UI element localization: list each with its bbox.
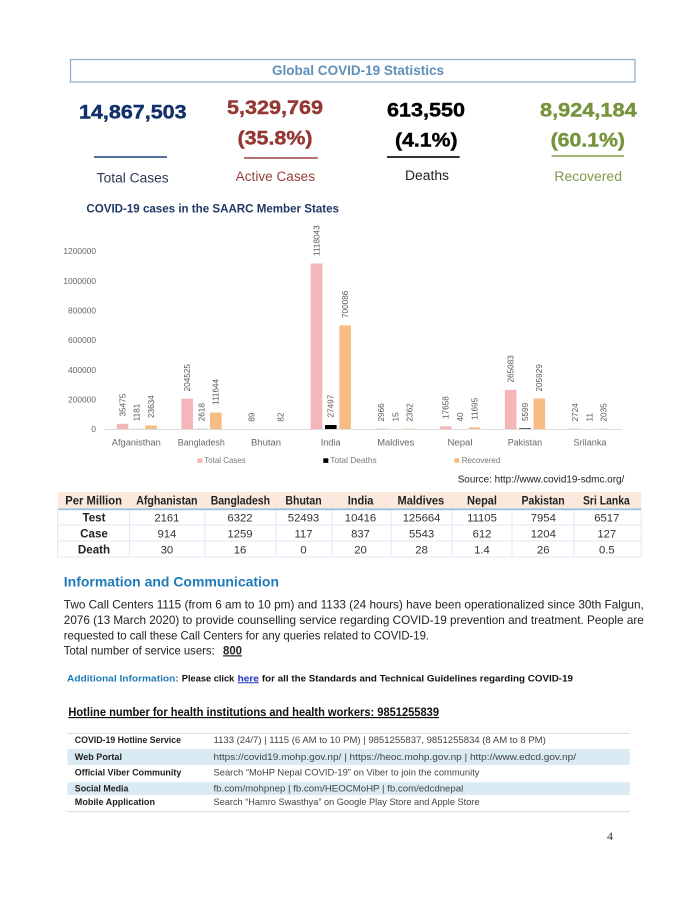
table header row: Bhutan [285, 494, 322, 507]
chart heading: COVID-19 cases in the SAARC Member States [86, 202, 339, 215]
row: web portal [75, 752, 576, 762]
bars: Srilanka: 2724 [571, 403, 580, 422]
paragraph: call centers [64, 599, 644, 657]
stat: deaths: Deaths [405, 168, 449, 183]
table header row: Maldives [398, 494, 444, 507]
row: social media [75, 784, 463, 794]
table header row: India [348, 494, 374, 507]
table row: test: 10416 [345, 513, 376, 525]
category labels [112, 436, 607, 447]
stat: recovered: 8,924,184 [540, 100, 637, 121]
table row: death: 26 [537, 544, 550, 556]
additional information line: for all the Standards and Technical Guidelines regarding COVID-19 [262, 673, 573, 684]
page number: 4 [607, 829, 613, 843]
title box [70, 60, 635, 82]
bars: Bangladesh: 204525 [183, 364, 192, 391]
y axis labels: 400000 [68, 365, 96, 375]
bars: Bangladesh: 111644 [212, 378, 221, 405]
table row: death: Death [78, 543, 110, 556]
row: viber community: Official Viber Community [75, 768, 182, 778]
stat: recovered [540, 100, 637, 184]
stat: total cases: Total Cases [97, 170, 169, 185]
stat: active cases: Active Cases [236, 169, 315, 184]
row: mobile application: Search “Hamro Swasthya” on Google Play Store and Apple Store [214, 797, 480, 807]
y axis labels: 200000 [68, 394, 96, 404]
row: mobile application: Mobile Application [75, 797, 155, 807]
per million table [58, 492, 641, 557]
bars: Nepal [440, 396, 480, 429]
bar chart: SAARC cases [63, 225, 623, 465]
paragraph: call centers: requested to call these Call Centers for any queries related to COVID-19. [64, 629, 429, 642]
stat: recovered: Recovered [554, 169, 622, 184]
paragraph: call centers: Two Call Centers 1115 (from 6 am to 10 pm) and 1133 (24 hours) have been operationalized since 30th Falgun, [64, 599, 644, 612]
bars: Afganisthan: 23634 [147, 395, 156, 418]
row: web portal: Web Portal [75, 752, 122, 762]
bars: Maldives [375, 403, 416, 429]
table header row: Bangladesh [211, 494, 270, 507]
row: viber community: Search “MoHP Nepal COVID-19” on Viber to join the community [214, 768, 480, 778]
category labels: India [321, 436, 341, 447]
table header row: Pakistan [522, 494, 565, 507]
table row: case: 837 [351, 529, 370, 541]
table row: case: 1259 [227, 529, 253, 541]
additional information line: Additional Information: [67, 673, 179, 684]
bars: Bhutan [248, 412, 285, 422]
bars: Nepal: 17658 [442, 396, 451, 419]
table row: test: Test [83, 512, 106, 525]
row: social media: Social Media [75, 784, 129, 794]
table row: test: 2161 [154, 513, 179, 525]
bars: Maldives: 2362 [406, 403, 415, 422]
bars: Pakistan: 265083 [507, 355, 516, 382]
table row: test: 52493 [288, 513, 319, 525]
bars: Afganisthan: 35475 [118, 393, 127, 416]
bars: India: 1118043 [312, 225, 321, 256]
stat: deaths: 613,550 [387, 101, 465, 122]
stat: deaths: (4.1%) [395, 131, 458, 152]
table row: death: 0.5 [599, 544, 615, 556]
category labels: Afganisthan [112, 436, 161, 447]
category labels: Srilanka [574, 436, 607, 447]
bars: Maldives: 2966 [377, 403, 386, 422]
row: mobile application [75, 797, 480, 807]
table row: death: 16 [234, 544, 246, 556]
table row: test: 6517 [594, 513, 619, 525]
category labels: Nepal [448, 436, 472, 447]
bars: Nepal: 40 [456, 412, 465, 422]
y axis labels: 1200000 [63, 246, 96, 256]
row: social media: fb.com/mohpnep | fb.com/HEOCMoHP | fb.com/edcdnepal [214, 784, 463, 794]
table row: case: 1204 [531, 529, 556, 541]
table header row: Afghanistan [136, 494, 198, 507]
table row: case [80, 528, 616, 541]
y axis labels: 0 [91, 424, 96, 434]
row: viber community [75, 768, 480, 778]
table row: test: 6322 [227, 513, 253, 525]
additional information line [67, 673, 573, 684]
table row: case: 612 [473, 529, 491, 541]
bars: India: 27497 [327, 394, 336, 418]
category labels: Bangladesh [178, 436, 225, 447]
source note: Source: http://www.covid19-sdmc.org/ [458, 475, 625, 486]
table row: test: 7954 [531, 513, 556, 525]
bars: Pakistan: 5599 [521, 402, 530, 421]
table row: death: 28 [415, 544, 428, 556]
y axis labels: 600000 [68, 335, 96, 345]
bars: India [311, 225, 351, 429]
legend [198, 455, 501, 465]
stat: total cases: 14,867,503 [79, 102, 187, 123]
table row: death [78, 543, 615, 556]
bars: Pakistan: 205929 [535, 364, 544, 392]
category labels: Bhutan [251, 436, 281, 447]
table row: case: 914 [157, 529, 176, 541]
category labels: Pakistan [508, 436, 542, 447]
bars: Bangladesh: 2618 [197, 403, 206, 421]
legend: Total Deaths [330, 455, 377, 465]
table row: test [83, 512, 619, 525]
table row: test: 125664 [403, 513, 440, 525]
table row: case: 5543 [409, 529, 434, 541]
bars: Pakistan [505, 355, 545, 429]
row: hotline service [75, 735, 546, 745]
bars: Bangladesh [181, 364, 222, 429]
row: web portal: https://covid19.mohp.gov.np/ | https://heoc.mohp.gov.np | http://www.edcd.gov.np/ [214, 752, 576, 762]
table header row [65, 494, 630, 507]
hotline heading: Hotline number for health institutions and health workers: 9851255839 [68, 706, 440, 719]
bars: Afganisthan [117, 393, 157, 429]
row: hotline service: COVID-19 Hotline Service [75, 735, 181, 745]
y axis labels: 1000000 [63, 276, 96, 286]
paragraph: call centers: 2076 (13 March 2020) to provide counselling service regarding COVID-19 prevention and treatment. People are [64, 614, 644, 627]
bars: Maldives: 15 [391, 412, 400, 422]
table row: case: Case [80, 528, 108, 541]
bars: Afganisthan: 1181 [133, 403, 142, 421]
row: hotline service: 1133 (24/7) | 1115 (6 AM to 10 PM) | 9851255837, 9851255834 (8 AM to 8 PM) [214, 735, 546, 745]
stat: recovered: (60.1%) [551, 131, 625, 152]
table row: case: 117 [294, 529, 313, 541]
bars: Srilanka: 2035 [600, 403, 609, 422]
section heading: Information and Communication [64, 575, 279, 591]
bars: India: 700086 [341, 290, 350, 318]
bars: Bhutan: 82 [276, 412, 285, 422]
table row: death: 1.4 [474, 544, 490, 556]
stat: active cases: (35.8%) [238, 128, 312, 149]
bars: Bhutan: 89 [248, 412, 257, 422]
legend: Recovered [462, 455, 501, 465]
table header row: Sri Lanka [583, 494, 630, 507]
bars: Srilanka [569, 403, 610, 429]
legend: Total Cases [204, 455, 246, 465]
title box: Global COVID-19 Statistics [272, 63, 444, 78]
paragraph: call centers: Total number of service users: [64, 644, 215, 657]
stat: deaths [387, 101, 465, 183]
stat: active cases: 5,329,769 [227, 98, 323, 119]
y axis labels [63, 246, 96, 434]
category labels: Maldives [377, 436, 415, 447]
table row: death: 0 [300, 544, 307, 556]
table header row: Nepal [467, 494, 497, 507]
additional information line: Please click [182, 673, 235, 684]
table row: death: 30 [161, 544, 173, 556]
contact table [67, 733, 630, 812]
y axis labels: 800000 [68, 306, 96, 316]
table header row: Per Million [65, 494, 122, 507]
bars: Nepal: 11695 [470, 397, 479, 420]
stat: total cases [79, 102, 187, 185]
table row: test: 11105 [467, 513, 497, 525]
additional information line: here [238, 673, 259, 684]
table row: case: 127 [597, 529, 616, 541]
table row: death: 20 [354, 544, 367, 556]
paragraph: call centers: 800 [223, 644, 242, 657]
bars: Srilanka: 11 [585, 413, 594, 422]
stat: active cases [227, 98, 323, 184]
